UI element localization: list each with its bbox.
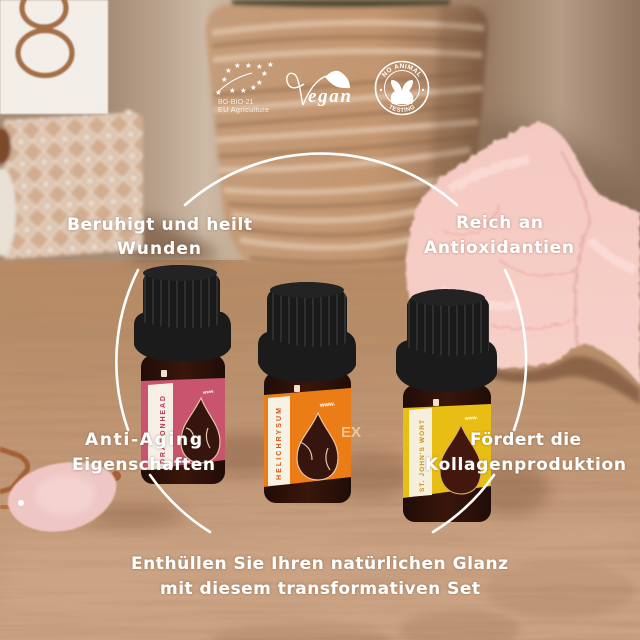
logo: no animal testing: TESTING — [390, 104, 415, 112]
certification logos — [215, 60, 430, 116]
cap — [258, 331, 356, 382]
label: pink — [141, 378, 225, 470]
logo: EU organic leaf: ★ — [256, 62, 263, 71]
bottle shadows — [85, 433, 550, 527]
text: tagline — [131, 554, 508, 599]
text: Anti-Aging Eigenschaften: Anti-Aging — [85, 430, 202, 450]
label: yellow: ST. JOHN'S WORT — [419, 420, 426, 492]
logo: EU organic leaf: ★ — [240, 86, 247, 95]
logo: Vegan: egan — [308, 86, 351, 107]
shadow under towel — [486, 356, 640, 405]
text: tagline: mit diesem transformativen Set — [160, 579, 480, 599]
bottle: st. john's wort (yellow label) — [396, 289, 497, 522]
calendar block with number 8 — [0, 0, 108, 114]
logo: EU organic leaf: ★ — [256, 78, 263, 87]
logo: no animal testing: NO ANIMAL — [382, 64, 421, 77]
logo: EU organic leaf: ★ — [250, 83, 257, 92]
label: orange — [264, 388, 361, 487]
logo: Vegan — [287, 71, 351, 107]
pink towel headband — [406, 122, 640, 385]
logo caption: BG-BIO-21 — [218, 97, 254, 106]
logo: EU organic leaf: ★ — [267, 60, 274, 69]
patterned gift box — [0, 109, 143, 259]
label: pink: DRAGONHEAD — [160, 396, 167, 464]
label: pink: www. — [201, 388, 215, 395]
text: Beruhigt und heilt Wunden: Wunden — [117, 239, 201, 259]
logo caption: EU Agriculture — [218, 105, 269, 114]
rose quartz facial roller — [0, 449, 121, 532]
cap — [396, 340, 497, 392]
logo: EU organic leaf: ★ — [261, 69, 268, 78]
bottle: dragonhead (pink label) — [134, 265, 231, 484]
logo: EU organic leaf: ★ — [221, 75, 228, 84]
text: Beruhigt und heilt Wunden: Beruhigt und heilt — [67, 215, 252, 235]
bottle: helichrysum (orange label) — [258, 282, 361, 503]
logo: EU organic leaf: ★ — [225, 66, 232, 75]
wicker basket — [206, 0, 490, 266]
white circle arcs — [116, 154, 526, 532]
logo: EU organic leaf: ★ — [245, 61, 252, 70]
text: Fördert die Kollagenproduktion: Fördert die — [470, 430, 581, 450]
logo: EU organic leaf — [215, 60, 274, 114]
label: orange: www. — [319, 401, 336, 409]
label: yellow: www. — [464, 415, 479, 422]
cap — [134, 312, 231, 362]
text: Anti-Aging Eigenschaften: Eigenschaften — [72, 455, 215, 475]
logo: EU organic leaf: ★ — [234, 61, 241, 70]
text: Reich an Antioxidantien: Reich an — [456, 213, 543, 233]
logo caption — [218, 97, 269, 114]
label: orange: HELICHRYSUM — [276, 408, 283, 480]
text: Beruhigt und heilt Wunden — [67, 215, 252, 259]
logo: no animal testing — [374, 60, 430, 116]
logo: EU organic leaf: ★ — [229, 86, 236, 95]
label: orange: EX — [341, 424, 361, 441]
text: Fördert die Kollagenproduktion: Kollagenproduktion — [425, 455, 626, 475]
label: yellow — [403, 404, 491, 498]
text: tagline: Enthüllen Sie Ihren natürlichen Glanz — [131, 554, 508, 574]
text: Reich an Antioxidantien — [424, 213, 574, 258]
logo: EU organic leaf: ★ — [215, 88, 222, 97]
text: Anti-Aging Eigenschaften — [72, 430, 215, 475]
text: Fördert die Kollagenproduktion — [425, 430, 626, 475]
text: Reich an Antioxidantien: Antioxidantien — [424, 238, 574, 258]
